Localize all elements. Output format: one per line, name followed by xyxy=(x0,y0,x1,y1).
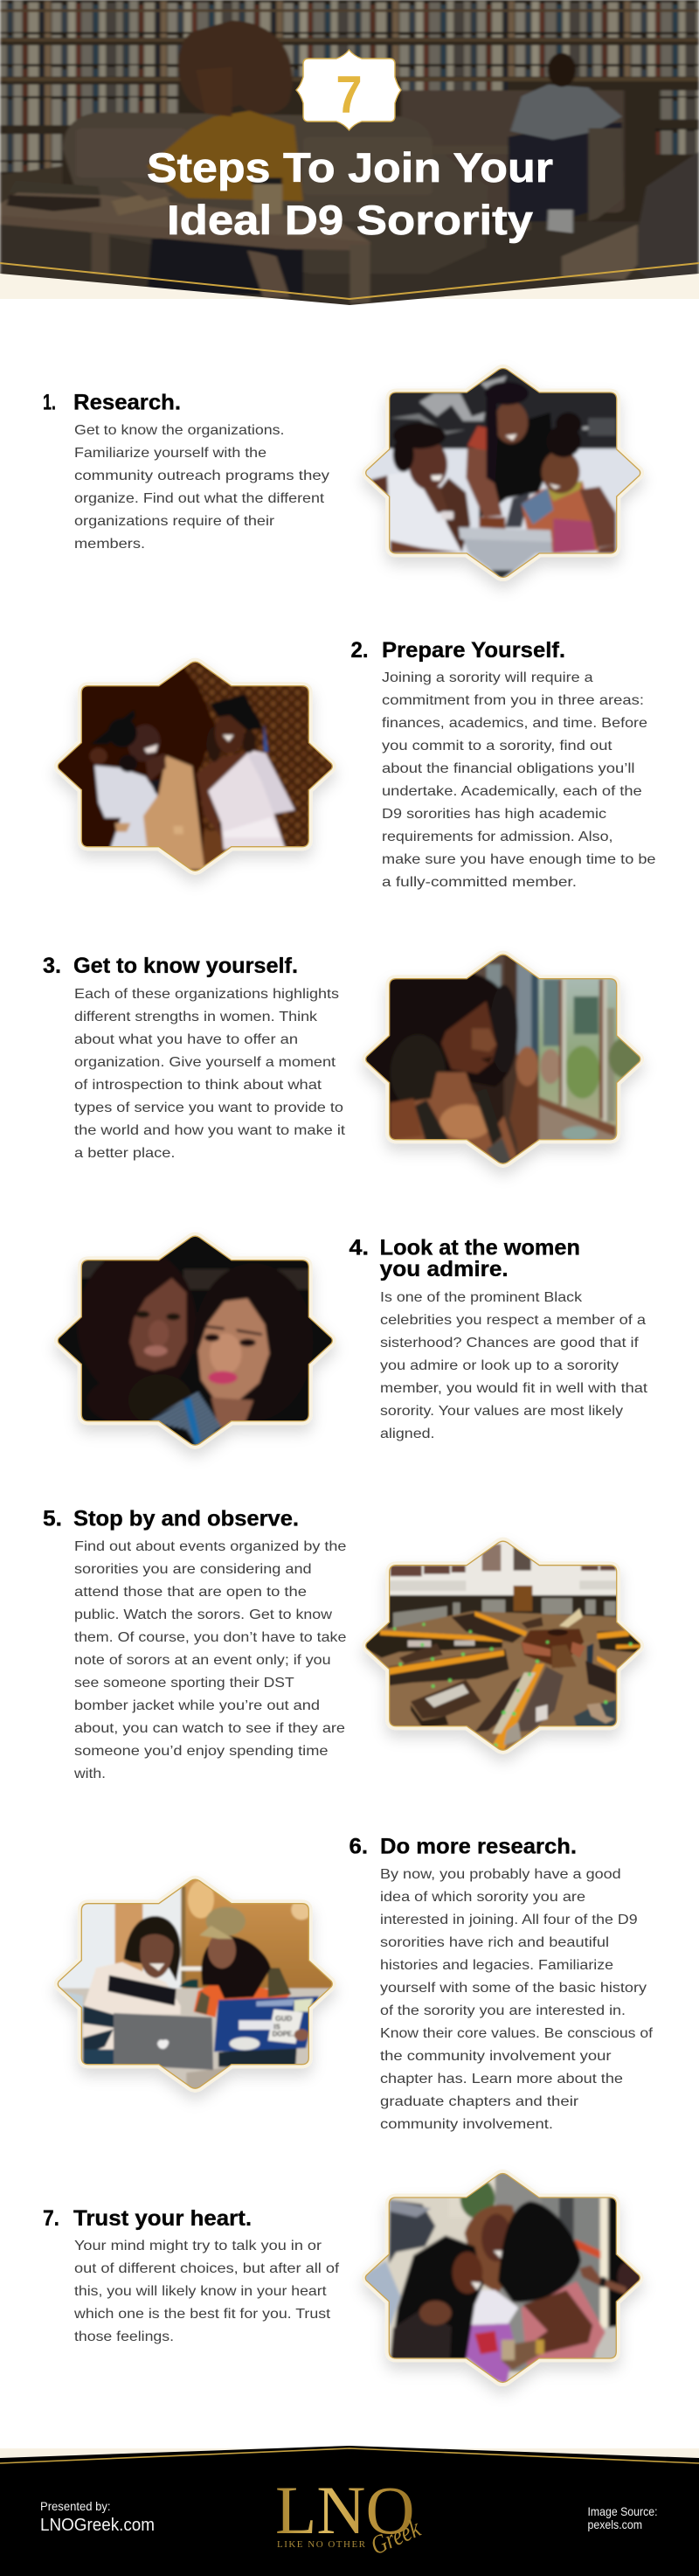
title xyxy=(147,144,553,243)
step 4 text: aligned. xyxy=(380,1427,435,1441)
step 6 text xyxy=(380,1867,654,2132)
step 7 heading: Trust your heart. xyxy=(73,2206,252,2231)
step 4 heading: Look at the women xyxy=(380,1236,580,1260)
step 4 text: you admire or look up to a sorority xyxy=(380,1358,619,1373)
step 2 heading: Prepare Yourself. xyxy=(382,638,565,663)
step 5 heading: 5. xyxy=(43,1507,62,1531)
step 3 text: the world and how you want to make it xyxy=(74,1123,346,1138)
step 7 text: which one is the best fit for you. Trust xyxy=(73,2307,331,2322)
footer xyxy=(0,2446,699,2576)
step 6 text: yourself with some of the basic history xyxy=(380,1981,647,1996)
image source xyxy=(587,2504,657,2531)
presented by: Presented by: xyxy=(40,2499,110,2513)
step 3 text xyxy=(74,987,346,1161)
photo: two graduates xyxy=(44,651,350,883)
step 5 text: note of sorors at an event only; if you xyxy=(74,1653,331,1668)
step 7 text: Your mind might try to talk you in or xyxy=(74,2239,322,2253)
step 5 text: Find out about events organized by the xyxy=(74,1539,347,1554)
step 2 text: commitment from you in three areas: xyxy=(382,693,644,708)
logo: LNO Like No Other Greek: LNO xyxy=(275,2472,414,2548)
step 4 text: sorority. Your values are most likely xyxy=(380,1404,623,1419)
step 4 text: member, you would fit in well with that xyxy=(380,1381,648,1396)
badge: number 7 xyxy=(296,50,401,130)
gold header line xyxy=(0,263,699,299)
step 2 text: a fully-committed member. xyxy=(382,875,577,890)
image source: Image Source: xyxy=(587,2504,657,2518)
step 6 text: the community involvement your xyxy=(380,2049,612,2064)
photo: two women with laptops: DOPE. xyxy=(273,2031,294,2038)
photo: two women with laptops: IS xyxy=(273,2023,281,2031)
photo: three women at a laptop xyxy=(360,365,647,593)
step 7 text: those feelings. xyxy=(74,2330,174,2344)
step 6 text: Know their core values. Be conscious of xyxy=(380,2026,654,2041)
step 3 text: Each of these organizations highlights xyxy=(74,987,339,1002)
title: Steps To Join Your xyxy=(147,144,553,191)
step 2 text: undertake. Academically, each of the xyxy=(382,784,642,799)
title: Ideal D9 Sorority xyxy=(167,197,533,243)
step 2 panel xyxy=(44,638,656,890)
step 6 panel xyxy=(44,1834,654,2132)
step 6 heading: 6. xyxy=(350,1834,368,1858)
step 2 text xyxy=(382,670,656,890)
header photo banner xyxy=(0,0,699,309)
step 3 text: about what you have to offer an xyxy=(74,1032,298,1047)
step 7 panel xyxy=(44,2170,647,2398)
step 5 text: bomber jacket while you’re out and xyxy=(74,1698,320,1713)
step 6 text: graduate chapters and their xyxy=(380,2094,579,2109)
step 1 text: Get to know the organizations. xyxy=(74,423,285,438)
step 5 text: public. Watch the sorors. Get to know xyxy=(74,1607,332,1622)
step 7 heading: 7. xyxy=(43,2206,59,2231)
photo: two women with laptops xyxy=(44,1869,350,2100)
step 6 text: of the sorority you are interested in. xyxy=(380,2003,626,2018)
step 5 text: about, you can watch to see if they are xyxy=(74,1721,345,1736)
presented by xyxy=(40,2499,155,2535)
step 4 heading: 4. xyxy=(350,1236,369,1260)
step 2 text: about the financial obligations you’ll xyxy=(382,761,634,776)
step 3 text: types of service you want to provide to xyxy=(74,1101,343,1115)
step 6 text: idea of which sorority you are xyxy=(380,1890,585,1905)
step 6 text: interested in joining. All four of the D9 xyxy=(380,1913,638,1927)
step 4 text: celebrities you respect a member of a xyxy=(380,1313,646,1328)
step 5 text: someone you’d enjoy spending time xyxy=(74,1744,329,1759)
photo: three women hugging xyxy=(359,2170,647,2398)
step 2 heading: 2. xyxy=(351,638,369,663)
step 1 heading: Research. xyxy=(73,390,181,414)
step 1 text: community outreach programs they xyxy=(74,469,329,483)
step 4 heading xyxy=(350,1236,580,1281)
step 2 text: D9 sororities has high academic xyxy=(382,807,606,822)
step 5 panel xyxy=(43,1507,655,1781)
logo: LNO Like No Other Greek: Greek xyxy=(366,2513,425,2560)
step 1 text: organize. Find out what the different xyxy=(74,491,325,506)
photo: two women with curly hair xyxy=(44,1226,350,1457)
step 3 text: organization. Give yourself a moment xyxy=(74,1055,336,1070)
gold footer line xyxy=(0,2448,699,2463)
step 1 heading: 1. xyxy=(43,390,56,414)
step 3 panel xyxy=(43,944,655,1176)
step 2 text: finances, academics, and time. Before xyxy=(382,716,647,731)
step 2 text: Joining a sorority will require a xyxy=(382,670,593,685)
step 3 text: a better place. xyxy=(74,1146,175,1161)
step 7 text xyxy=(73,2239,340,2344)
step 2 text: make sure you have enough time to be xyxy=(382,852,656,867)
step 3 heading: Get to know yourself. xyxy=(73,954,298,978)
step 1 text xyxy=(74,423,329,552)
step 1 text: organizations require of their xyxy=(74,514,275,529)
step 6 text: sororities have rich and beautiful xyxy=(380,1935,609,1950)
step 6 text: By now, you probably have a good xyxy=(380,1867,621,1882)
badge: number 7: 7 xyxy=(336,65,362,124)
step 4 panel xyxy=(44,1226,648,1457)
step 7 text: this, you will likely know in your heart xyxy=(74,2284,327,2299)
step 2 text: you commit to a sorority, find out xyxy=(382,739,612,753)
step 3 text: different strengths in women. Think xyxy=(74,1010,318,1024)
step 4 text xyxy=(380,1290,648,1441)
step 6 heading: Do more research. xyxy=(380,1834,577,1858)
step 5 text: sororities you are considering and xyxy=(74,1562,312,1577)
photo: two women with laptops: GUD xyxy=(275,2014,292,2023)
step 6 text: chapter has. Learn more about the xyxy=(380,2072,623,2086)
step 1 text: Familiarize yourself with the xyxy=(74,446,266,461)
step 5 text xyxy=(73,1539,347,1781)
step 2 text: requirements for admission. Also, xyxy=(382,830,613,844)
step 5 text: them. Of course, you don’t have to take xyxy=(74,1630,347,1645)
photo: woman at a window xyxy=(350,944,655,1176)
step 6 text: histories and legacies. Familiarize xyxy=(380,1958,613,1973)
step 4 text: sisterhood? Chances are good that if xyxy=(380,1336,639,1350)
step 3 text: of introspection to think about what xyxy=(74,1078,322,1093)
image source: pexels.com xyxy=(587,2517,642,2531)
step 5 text: see someone sporting their DST xyxy=(74,1676,294,1691)
step 6 text: community involvement. xyxy=(380,2117,553,2132)
logo: LNO Like No Other Greek: LIKE NO OTHER xyxy=(277,2539,366,2550)
step 4 text: Is one of the prominent Black xyxy=(380,1290,583,1305)
step 1 panel xyxy=(43,350,664,594)
step 4 heading: you admire. xyxy=(380,1257,509,1281)
photo: library reading room xyxy=(350,1530,655,1761)
step 3 heading: 3. xyxy=(43,954,61,978)
step 1 text: members. xyxy=(74,537,145,552)
step 5 text: with. xyxy=(73,1767,106,1781)
step 5 text: attend those that are open to the xyxy=(74,1585,307,1600)
step 7 text: out of different choices, but after all of xyxy=(74,2261,340,2276)
presented by: LNOGreek.com xyxy=(40,2516,155,2535)
step 5 heading: Stop by and observe. xyxy=(73,1507,299,1531)
